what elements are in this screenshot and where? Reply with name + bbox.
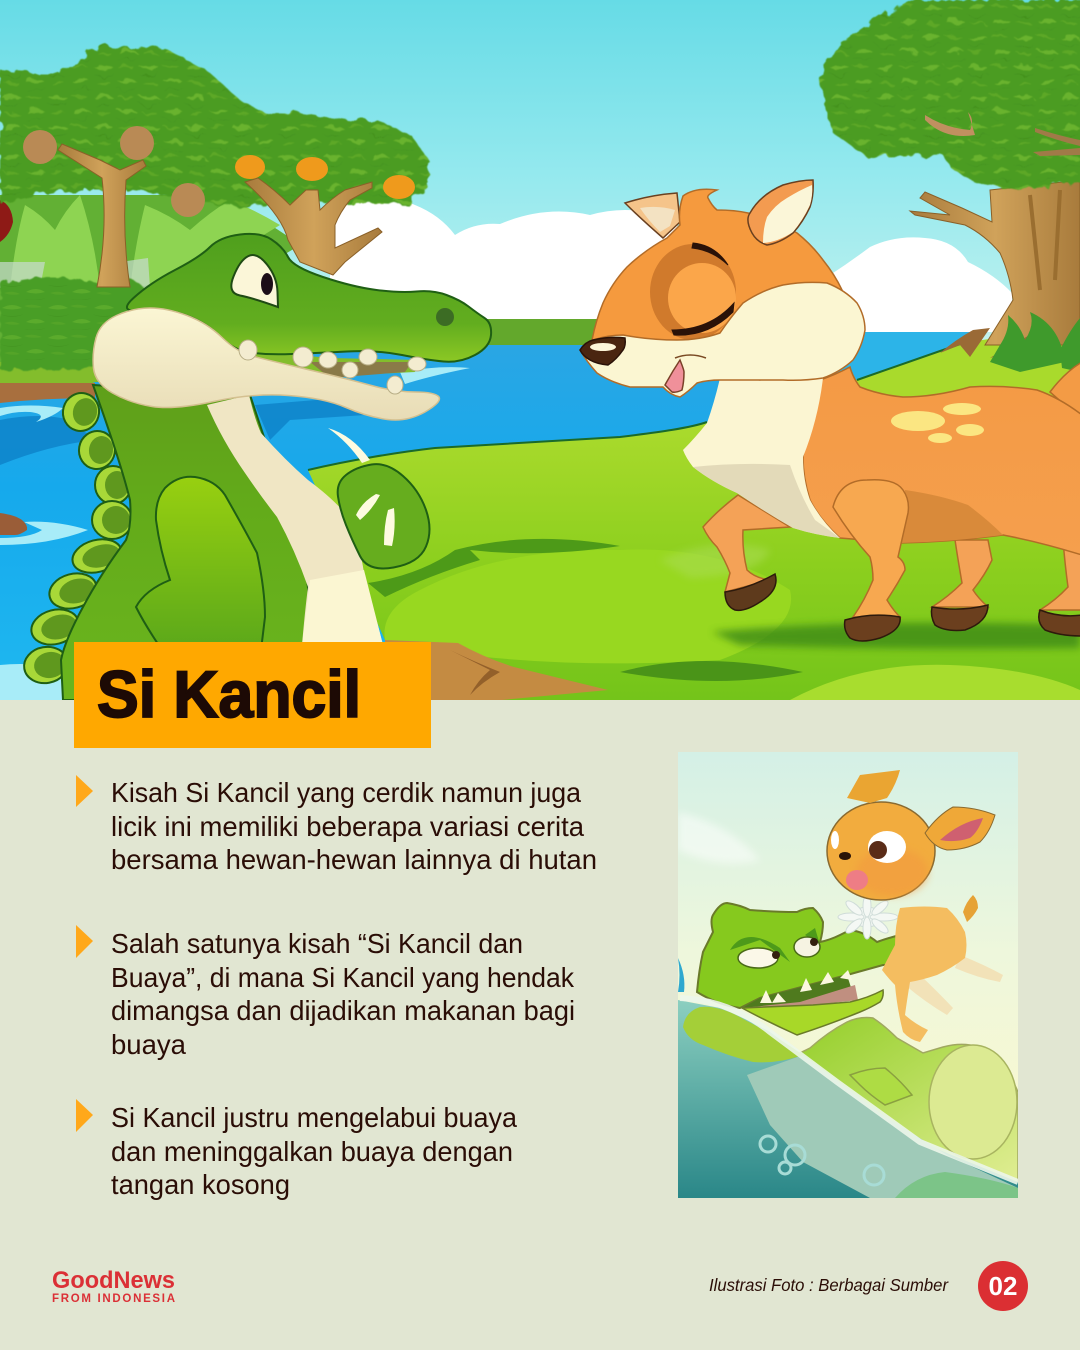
bullet 1: bersama hewan-hewan lainnya di hutan xyxy=(111,844,597,875)
foreground grass xyxy=(308,325,1080,700)
left bank xyxy=(0,354,416,383)
crocodile head xyxy=(697,903,902,1008)
eye xyxy=(231,255,278,307)
small rock in the water xyxy=(0,513,27,535)
far shore xyxy=(487,319,596,345)
river shadows xyxy=(0,398,365,465)
river xyxy=(0,345,840,665)
nostril xyxy=(436,308,454,326)
bullet 2: Buaya”, di mana Si Kancil yang hendak xyxy=(111,962,574,993)
deer nose and mouth xyxy=(839,852,851,860)
hooves xyxy=(725,574,776,610)
page number badge xyxy=(978,1261,1028,1311)
right ear xyxy=(748,180,813,245)
bullet 2: Salah satunya kisah “Si Kancil dan xyxy=(111,928,523,959)
logo: GoodNews from Indonesia xyxy=(52,1267,175,1305)
river highlights xyxy=(0,367,470,700)
hand xyxy=(338,464,430,568)
grass highlights xyxy=(384,550,791,663)
page number badge: 02 xyxy=(989,1271,1017,1301)
crocodile eyes xyxy=(738,948,778,968)
bubbles xyxy=(760,1136,884,1185)
bullet 3 xyxy=(76,1099,518,1200)
mouth xyxy=(665,360,684,392)
photo credit: Ilustrasi Foto : Berbagai Sumber xyxy=(709,1275,949,1295)
head xyxy=(592,189,842,380)
sky xyxy=(678,752,1018,1198)
trunk 1 xyxy=(58,144,146,287)
hind rump xyxy=(1049,362,1080,412)
bullet 3: Si Kancil justru mengelabui buaya xyxy=(111,1102,518,1133)
title: Si Kancil xyxy=(97,657,361,731)
sky xyxy=(0,0,1080,345)
head xyxy=(127,234,491,362)
bullet 2: buaya xyxy=(111,1029,187,1060)
crocodile xyxy=(21,234,491,700)
deer body xyxy=(882,906,966,1042)
spots xyxy=(891,403,984,443)
mouse-deer xyxy=(580,180,1080,641)
side illustration: mouse-deer on crocodile snout xyxy=(678,752,1018,1198)
rock at title tag xyxy=(385,640,608,700)
deer head xyxy=(827,802,935,900)
logo: GoodNews from Indonesia: FROM INDONESIA xyxy=(52,1293,175,1305)
upper leg xyxy=(833,480,908,617)
belly shade xyxy=(900,490,1003,543)
trunk 2 xyxy=(245,178,382,275)
clouds xyxy=(330,200,1012,332)
snout under the wave xyxy=(683,1007,803,1062)
deer hind legs xyxy=(905,955,1003,1015)
left ear xyxy=(625,193,680,238)
claws xyxy=(328,428,395,546)
bullet 3: tangan kosong xyxy=(111,1169,290,1200)
right tree xyxy=(818,0,1080,372)
pine cones xyxy=(23,130,57,164)
deer eye xyxy=(868,831,906,863)
flower xyxy=(838,895,898,939)
far legs xyxy=(932,540,992,607)
body xyxy=(803,367,1080,555)
bullet 1: Kisah Si Kancil yang cerdik namun juga xyxy=(111,777,582,808)
bullet 2 xyxy=(76,925,575,1060)
lower jaw xyxy=(742,990,883,1035)
left trees foliage xyxy=(0,45,430,287)
logo: GoodNews from Indonesia: GoodNews xyxy=(52,1267,175,1294)
bullet 1: licik ini memiliki beberapa variasi cerita xyxy=(111,811,585,842)
neck bib xyxy=(683,378,840,538)
neck stripe xyxy=(207,395,383,645)
left bushes xyxy=(0,195,300,370)
title tag xyxy=(74,642,431,748)
bullet 2: dimangsa dan dijadikan makanan bagi xyxy=(111,995,575,1026)
bullet 1 xyxy=(76,775,597,875)
antler tuft xyxy=(847,770,900,803)
nose xyxy=(580,337,625,365)
main illustration: crocodile and mouse-deer xyxy=(0,0,1080,700)
crocodile body xyxy=(745,1018,1018,1198)
lower jaw xyxy=(93,308,439,420)
spikes xyxy=(21,389,132,687)
arm xyxy=(136,477,265,650)
closed eye xyxy=(672,303,734,335)
water xyxy=(678,1000,1018,1198)
grass shadows xyxy=(368,539,620,597)
eye patch xyxy=(650,244,736,340)
cheek and muzzle xyxy=(580,282,865,397)
body xyxy=(61,385,320,700)
lifted foreleg xyxy=(703,495,790,592)
bullet 3: dan meninggalkan buaya dengan xyxy=(111,1136,513,1167)
mouth xyxy=(742,975,855,1008)
deer ear xyxy=(925,807,995,850)
teeth xyxy=(239,340,426,394)
oranges xyxy=(235,155,265,179)
